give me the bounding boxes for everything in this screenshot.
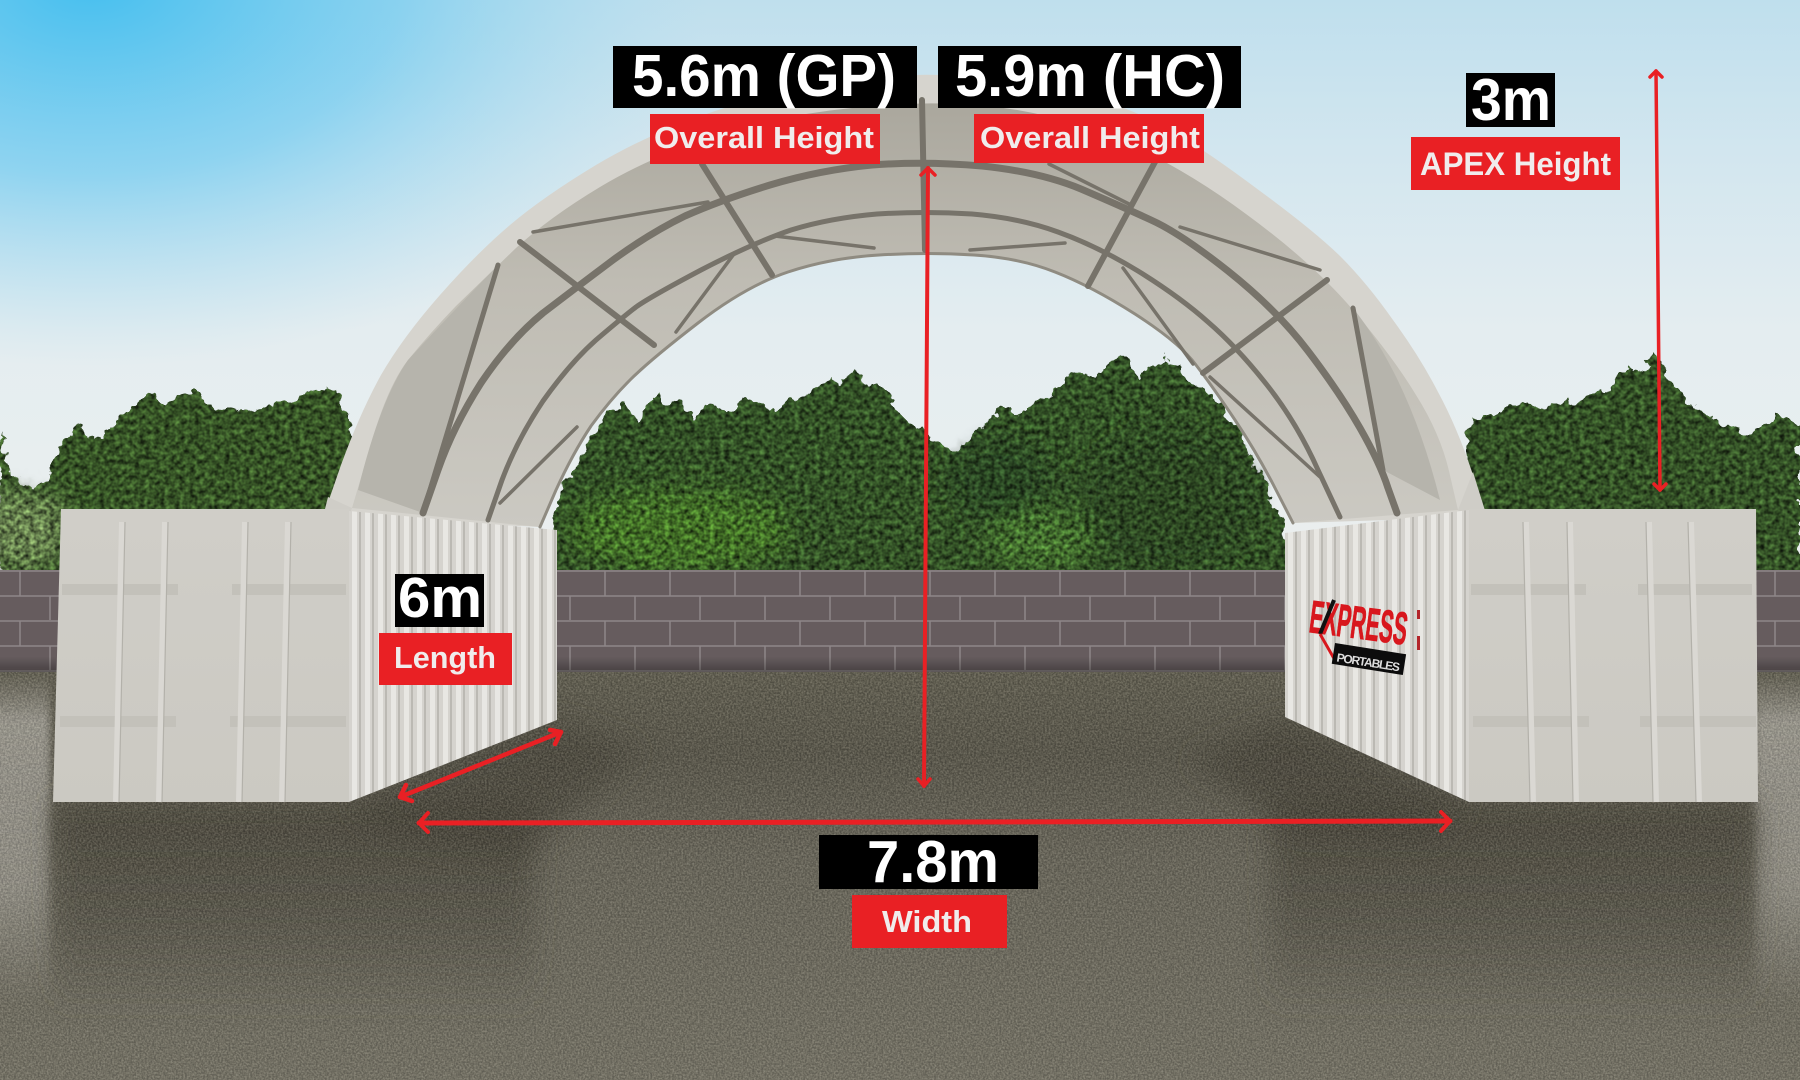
sky background bbox=[0, 0, 1800, 600]
right foot flap bbox=[1458, 472, 1487, 524]
label: 6m length bbox=[379, 566, 512, 685]
label: 7.8m width bbox=[819, 829, 1038, 948]
label: 7.8m width: Width bbox=[882, 904, 972, 939]
logo: Express Portables bbox=[1307, 590, 1420, 675]
arrow: apex height bbox=[1650, 71, 1666, 490]
left container side bbox=[349, 511, 557, 802]
logo: Express Portables: EXPRESS bbox=[1307, 590, 1411, 655]
label: 5.6m GP overall height: 5.6m (GP) bbox=[632, 43, 896, 109]
label: 5.9m HC overall height bbox=[938, 43, 1241, 163]
right container door bars bbox=[1471, 522, 1756, 802]
arrow: width bbox=[419, 812, 1450, 832]
label: 6m length: 6m bbox=[398, 566, 482, 630]
right container front bbox=[1469, 509, 1758, 802]
arch outer rim bbox=[323, 75, 1487, 527]
arch inner fabric bbox=[352, 103, 1458, 527]
arrow: overall height bbox=[918, 168, 935, 786]
right container bbox=[1285, 509, 1758, 802]
arch end mesh panels bbox=[358, 265, 1440, 513]
label: 3m apex height: APEX Height bbox=[1420, 146, 1611, 182]
right container side bbox=[1285, 510, 1469, 802]
arch ribs and purlins bbox=[423, 100, 1397, 527]
logo: Express Portables: PORTABLES bbox=[1336, 651, 1401, 674]
left container front bbox=[53, 509, 349, 802]
label: 6m length: Length bbox=[394, 640, 496, 675]
label: 7.8m width: 7.8m bbox=[867, 829, 999, 895]
arch shelter bbox=[323, 75, 1487, 527]
label: 5.6m GP overall height: Overall Height bbox=[654, 120, 874, 155]
label: 5.9m HC overall height: Overall Height bbox=[980, 120, 1200, 155]
left container door bars bbox=[60, 522, 346, 802]
arrow: length bbox=[400, 730, 561, 801]
brick wall bbox=[0, 570, 1800, 672]
label: 3m apex height: 3m bbox=[1471, 67, 1551, 133]
label: 3m apex height bbox=[1411, 67, 1620, 190]
left foot flap bbox=[323, 497, 352, 525]
ground bbox=[0, 672, 1800, 1080]
left container bbox=[53, 509, 557, 802]
label: 5.6m GP overall height bbox=[613, 43, 917, 164]
label: 5.9m HC overall height: 5.9m (HC) bbox=[955, 43, 1225, 109]
tree line bbox=[0, 350, 1800, 600]
